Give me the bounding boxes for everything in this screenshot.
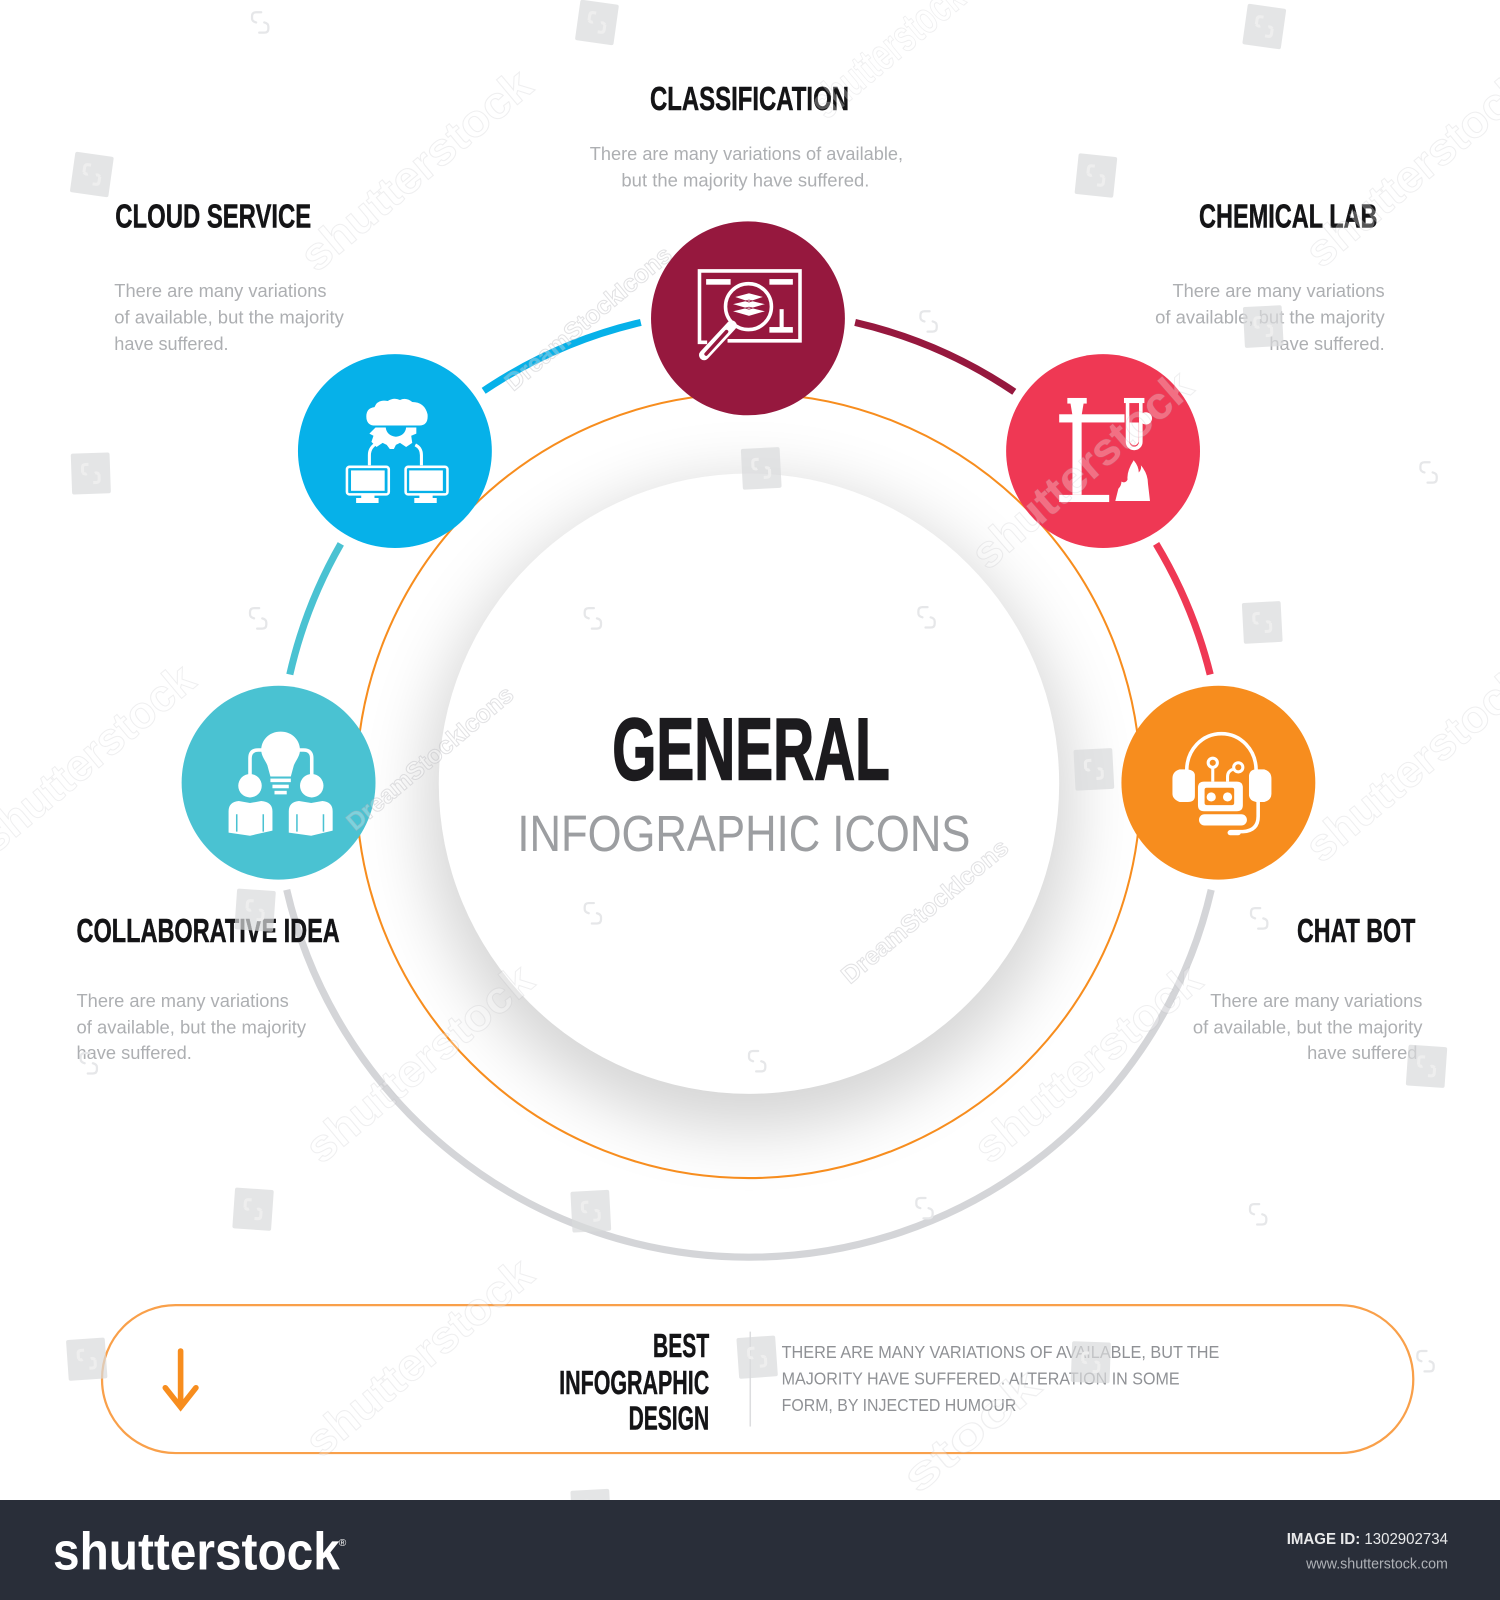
icon: chemical lab <box>1059 398 1152 502</box>
banner heading <box>559 1328 709 1438</box>
banner text <box>782 1342 1219 1415</box>
divider <box>749 1332 751 1427</box>
icon: chat bot <box>1172 734 1271 835</box>
text: chemical lab: There are many variations <box>1172 280 1385 301</box>
heading: collaborative idea: COLLABORATIVE IDEA <box>77 913 340 950</box>
text: collaborative idea: of available, but the majority <box>77 1017 307 1038</box>
footer logo: shutterstock <box>53 1522 340 1581</box>
bottom banner <box>102 1305 1413 1453</box>
node: chat bot <box>1121 686 1315 880</box>
title: GENERAL <box>612 701 890 799</box>
banner text: FORM, BY INJECTED HUMOUR <box>782 1395 1016 1415</box>
text: collaborative idea <box>77 990 307 1063</box>
footer bar <box>0 1500 1500 1600</box>
node: chemical lab <box>1006 354 1200 548</box>
watermark overlay: shutterstock <box>295 1247 543 1467</box>
text: collaborative idea: There are many variations <box>77 990 289 1011</box>
watermark overlay: DreamStockIcons <box>837 834 1014 989</box>
icon: classification <box>699 271 800 355</box>
node: collaborative idea <box>182 686 376 880</box>
text: chat bot: have suffered. <box>1307 1042 1422 1063</box>
node: cloud service <box>298 354 492 548</box>
banner text: THERE ARE MANY VARIATIONS OF AVAILABLE, BUT THE <box>782 1342 1219 1362</box>
heading: classification: CLASSIFICATION <box>650 81 849 118</box>
footer url: www.shutterstock.com <box>1305 1556 1448 1572</box>
text: cloud service: of available, but the majority <box>114 306 344 327</box>
text: chemical lab <box>1155 280 1385 354</box>
node: classification <box>651 221 845 415</box>
text: cloud service: There are many variations <box>114 280 327 301</box>
subtitle: INFOGRAPHIC ICONS <box>517 805 970 862</box>
registered mark: ® <box>339 1538 347 1549</box>
text: chat bot <box>1193 990 1423 1063</box>
watermark overlay: shutterstock <box>295 954 543 1173</box>
text: chat bot: of available, but the majority <box>1193 1017 1423 1038</box>
watermark overlay: stock <box>892 1359 1050 1503</box>
icon: cloud service <box>347 399 447 503</box>
arc segments <box>287 322 1211 1257</box>
watermark overlay: shutterstock <box>290 58 542 281</box>
heading: chat bot: CHAT BOT <box>1297 913 1416 950</box>
orange ring <box>356 393 1141 1178</box>
image id: IMAGE ID: 1302902734 <box>1287 1531 1448 1548</box>
banner heading: DESIGN <box>629 1401 709 1438</box>
icon: down arrow <box>165 1351 196 1407</box>
text: classification: There are many variations of available, <box>590 143 903 164</box>
banner text: MAJORITY HAVE SUFFERED. ALTERATION IN SOME <box>782 1369 1180 1389</box>
watermark overlay: DreamStockIcons <box>342 681 519 836</box>
watermark overlay: shutterstock <box>961 360 1202 579</box>
text: collaborative idea: have suffered. <box>77 1042 192 1063</box>
text: chat bot: There are many variations <box>1210 990 1422 1011</box>
text: chemical lab: have suffered. <box>1269 333 1385 354</box>
text: classification: but the majority have suffered. <box>621 170 869 191</box>
banner heading: INFOGRAPHIC <box>559 1365 709 1402</box>
text: cloud service: have suffered. <box>114 333 229 354</box>
text: classification <box>590 143 903 191</box>
text: chemical lab: of available, but the majority <box>1155 306 1385 327</box>
watermark overlay: shutterstock <box>963 954 1211 1173</box>
heading: chemical lab: CHEMICAL LAB <box>1199 199 1378 236</box>
banner heading: BEST <box>653 1328 709 1365</box>
watermark overlay: DreamStockIcons <box>500 241 677 396</box>
heading: cloud service: CLOUD SERVICE <box>115 199 311 236</box>
icon: collaborative idea <box>229 732 333 836</box>
inner circle shadow <box>424 473 1073 1131</box>
text: cloud service <box>114 280 344 354</box>
